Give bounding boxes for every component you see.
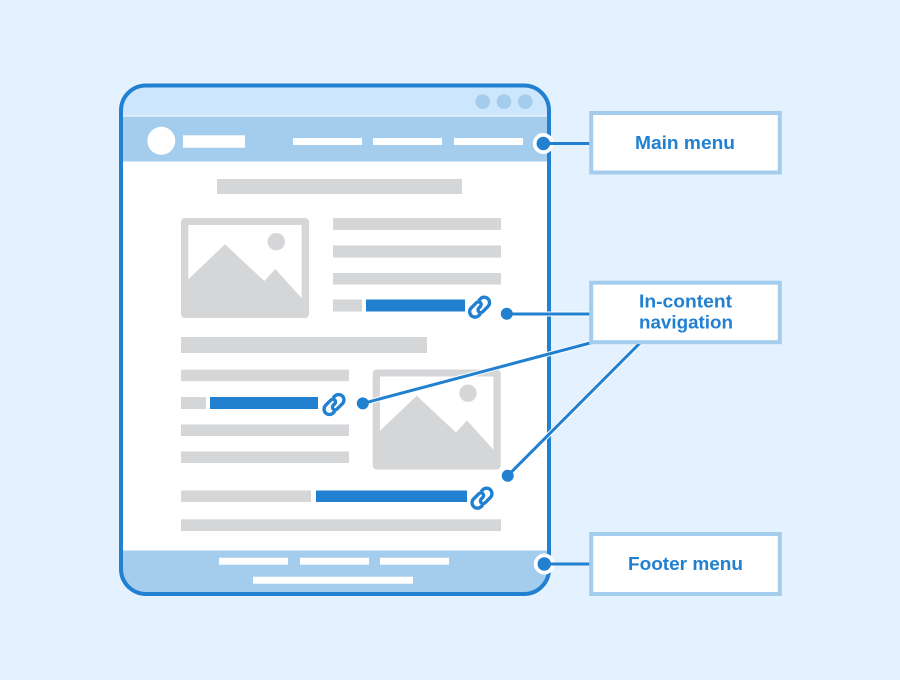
text lines block 1 xyxy=(333,218,501,312)
main menu bar xyxy=(119,116,551,162)
in-content link 3 xyxy=(316,490,467,502)
callout: main menu xyxy=(591,113,780,172)
connector: in-content navigation, middle xyxy=(357,342,592,409)
callout: in-content navigation: In-content xyxy=(639,291,732,311)
page title placeholder xyxy=(217,179,462,194)
in-content link 1 xyxy=(366,300,465,312)
footer menu items xyxy=(219,558,449,584)
icon: chain link 2 xyxy=(322,392,346,417)
in-content link 2 xyxy=(210,397,318,409)
callout: footer menu: Footer menu xyxy=(628,554,743,574)
panel: browser window xyxy=(119,84,551,596)
text line with link row xyxy=(181,490,311,502)
logo placeholder xyxy=(147,127,245,155)
callout: in-content navigation xyxy=(591,283,780,342)
image placeholder 1 xyxy=(181,218,309,318)
connector: in-content navigation, lower xyxy=(502,342,641,482)
browser title bar xyxy=(123,88,547,116)
callout: main menu: Main menu xyxy=(635,133,735,153)
window control dots xyxy=(475,94,533,109)
callout: footer menu xyxy=(591,534,780,594)
icon: chain link 3 xyxy=(470,486,494,510)
footer bar xyxy=(123,550,547,592)
section heading placeholder xyxy=(181,337,427,353)
connector: main menu xyxy=(533,133,591,154)
image placeholder 2 xyxy=(373,370,501,470)
main menu items xyxy=(293,138,523,145)
icon: chain link 1 xyxy=(467,295,492,319)
window border xyxy=(121,86,549,594)
bottom text line xyxy=(181,519,501,531)
text lines block 2 xyxy=(181,370,349,463)
callout: in-content navigation: navigation xyxy=(639,312,733,332)
connector: in-content navigation, upper xyxy=(501,308,591,320)
connector: footer menu xyxy=(534,554,591,574)
